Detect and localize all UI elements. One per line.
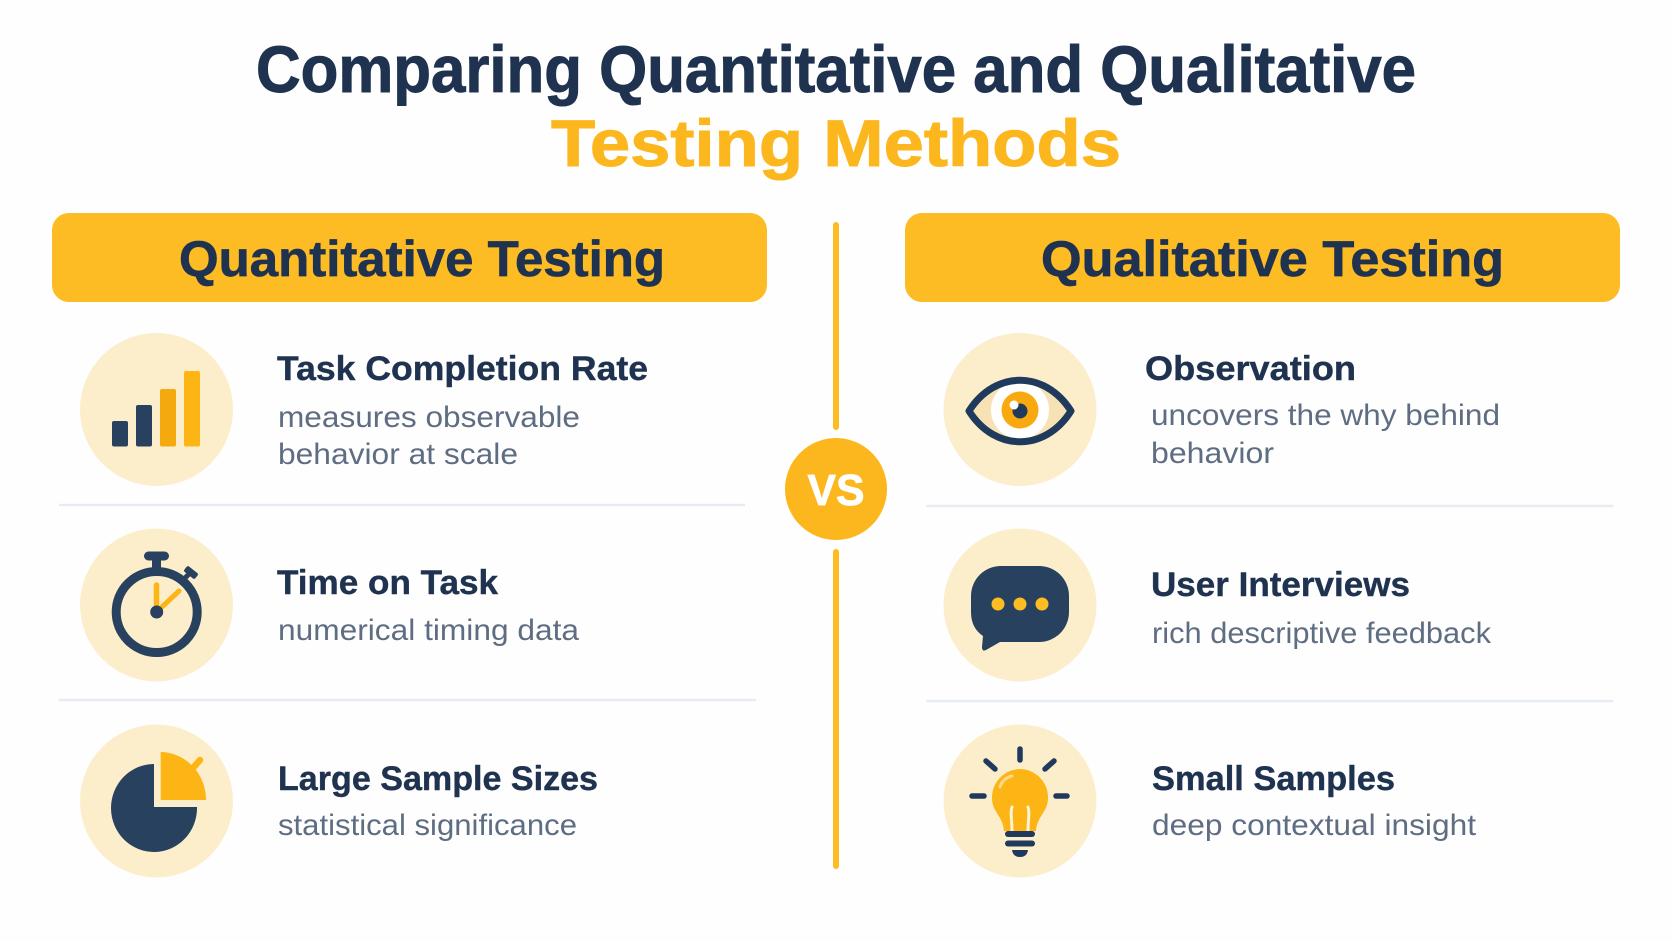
text: small samples: deep contextual insight xyxy=(1152,809,1477,842)
text: task completion rate xyxy=(277,350,648,471)
icon: eye xyxy=(944,333,1096,486)
title: Comparing Quantitative and Qualitative xyxy=(256,32,1416,106)
icon: light bulb xyxy=(944,724,1096,878)
text: time on task: Time on Task xyxy=(277,564,498,602)
text: user interviews: User Interviews xyxy=(1151,566,1410,604)
vs badge xyxy=(785,438,887,540)
icon: stopwatch xyxy=(80,528,233,682)
panel header: quantitative testing xyxy=(52,213,767,302)
text: observation: Observation xyxy=(1145,350,1356,388)
text: user interviews xyxy=(1151,566,1492,650)
text: small samples: Small Samples xyxy=(1152,760,1395,798)
text: task completion rate: measures observable xyxy=(278,401,580,434)
icon: bar chart xyxy=(80,333,233,486)
text: large sample sizes xyxy=(278,760,598,842)
panel: qualitative items xyxy=(944,333,1500,878)
text: large sample sizes: Large Sample Sizes xyxy=(278,760,598,798)
title: Testing Methods xyxy=(551,106,1121,180)
vs badge: VS xyxy=(808,466,864,515)
text: time on task xyxy=(277,564,579,647)
panel: quantitative items xyxy=(80,333,648,878)
panel header: quantitative testing: Quantitative Testing xyxy=(179,231,665,287)
text: task completion rate: Task Completion Rate xyxy=(277,350,648,388)
panel header: qualitative testing: Qualitative Testing xyxy=(1041,231,1504,287)
text: small samples xyxy=(1152,760,1477,842)
center divider line xyxy=(833,222,839,869)
row dividers xyxy=(59,505,1613,701)
text: user interviews: rich descriptive feedback xyxy=(1152,617,1492,650)
title xyxy=(256,32,1416,180)
text: observation xyxy=(1145,350,1500,470)
text: observation: behavior xyxy=(1151,437,1274,470)
text: large sample sizes: statistical significance xyxy=(278,809,577,842)
icon: speech bubble xyxy=(944,528,1096,682)
text: task completion rate: behavior at scale xyxy=(278,438,518,471)
text: time on task: numerical timing data xyxy=(278,614,579,647)
panel header: qualitative testing xyxy=(905,213,1620,302)
icon: pie chart xyxy=(80,724,233,878)
text: observation: uncovers the why behind xyxy=(1151,399,1500,432)
